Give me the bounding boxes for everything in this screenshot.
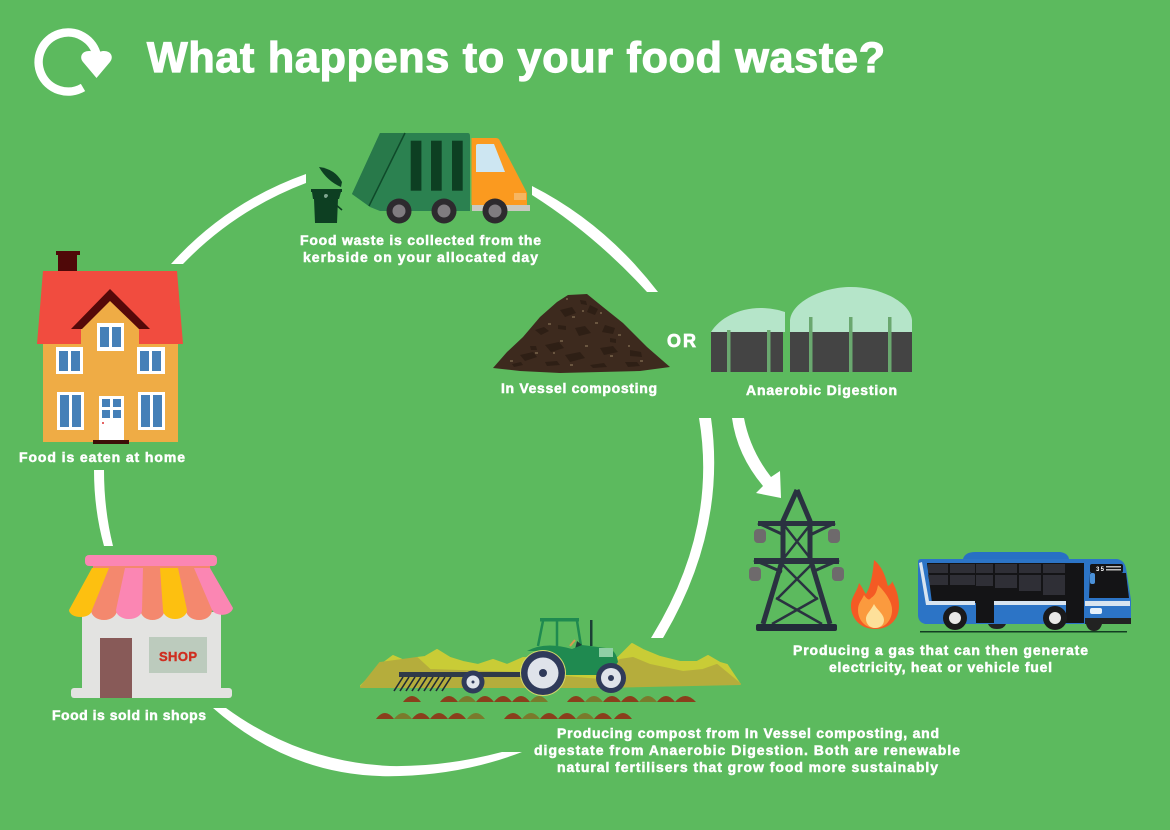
arrow: shops to home: [94, 470, 113, 546]
caption: collection: kerbside on your allocated day: [303, 249, 538, 265]
arrow: home to collection: [171, 174, 306, 264]
plough: [394, 670, 523, 694]
title: What happens to your food waste?: [147, 34, 885, 82]
icon: flame: [851, 560, 899, 629]
arrow: digestion to energy: [732, 418, 781, 498]
caption: shops: Food is sold in shops: [52, 707, 206, 723]
tractor: [520, 618, 626, 696]
arrow: farm to shops: [213, 708, 522, 776]
icon: collection truck: [352, 133, 530, 224]
icon: electricity pylon: [749, 490, 844, 631]
icon: recycling loop with heart: [39, 33, 112, 92]
icon: bus: [918, 552, 1131, 632]
caption: energy: [793, 642, 1088, 675]
caption: energy: Producing a gas that can then generate: [793, 642, 1088, 658]
soil mounds: [376, 696, 696, 719]
field hills: [361, 644, 740, 687]
caption: collection: [300, 232, 541, 265]
caption: compost and digestate: natural fertilisers that grow food more sustainably: [557, 759, 938, 775]
caption: home: Food is eaten at home: [19, 449, 185, 465]
icon: house: [37, 251, 183, 444]
label: or: OR: [667, 331, 696, 351]
caption: anaerobic digestion: Anaerobic Digestion: [746, 382, 897, 398]
arrow: treatment to farm: [651, 418, 714, 638]
caption: compost and digestate: digestate from Anaerobic Digestion. Both are renewable: [534, 742, 960, 758]
shop sign text: SHOP: [159, 649, 197, 664]
caption: collection: Food waste is collected from the: [300, 232, 541, 248]
caption: compost and digestate: Producing compost from In Vessel composting, and: [557, 725, 939, 741]
icon: food waste bin: [311, 167, 342, 223]
caption: energy: electricity, heat or vehicle fuel: [829, 659, 1052, 675]
caption: compost and digestate: [534, 725, 960, 775]
bus route number: 35: [1096, 567, 1105, 573]
icon: farm with tractor: [361, 618, 740, 719]
icon: shop: [69, 555, 233, 698]
icon: anaerobic digesters: [711, 287, 912, 372]
caption: in vessel composting: In Vessel composting: [501, 380, 657, 396]
arrow: collection to treatment: [532, 186, 658, 292]
icon: compost pile: [493, 294, 670, 373]
awning: [69, 555, 233, 620]
